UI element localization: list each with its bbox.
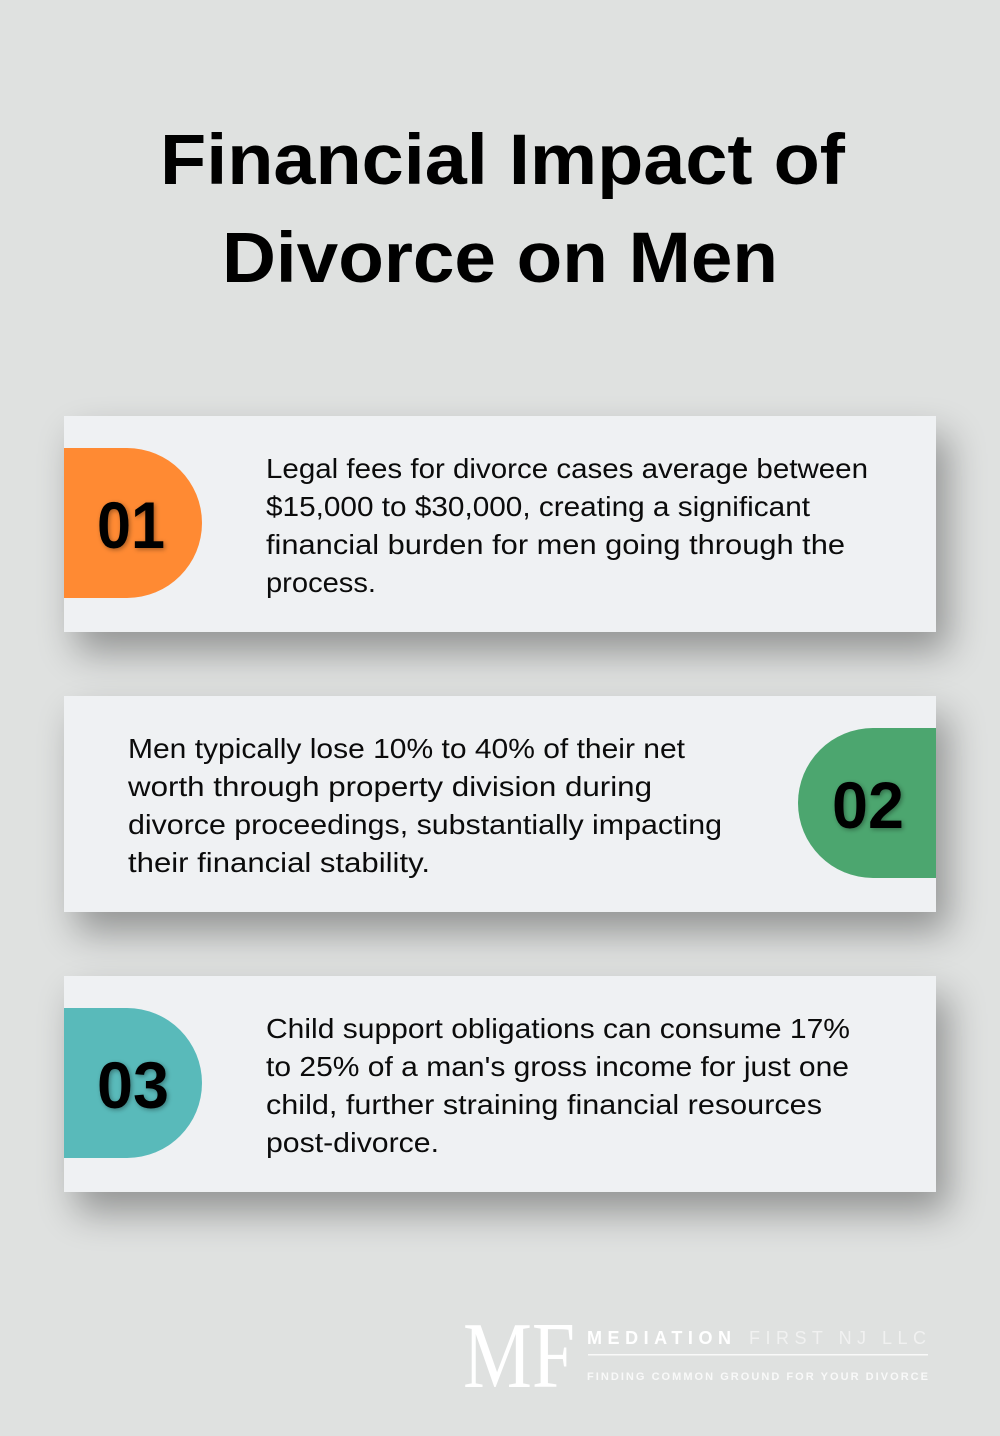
text: legal fees: $15,000 to $30,000, creating a significant <box>266 491 810 522</box>
text: child support: post-divorce. <box>266 1127 439 1158</box>
text: child support: child, further straining financial resources <box>266 1089 822 1120</box>
badge 01: 01 <box>97 488 165 562</box>
text: legal fees: Legal fees for divorce cases average between <box>266 453 868 484</box>
badge 03: 03 <box>97 1048 169 1122</box>
text: net worth: their financial stability. <box>128 847 430 878</box>
badge 02: 02 <box>832 768 904 842</box>
text: legal fees: process. <box>266 567 376 598</box>
text: net worth: worth through property division during <box>127 771 652 802</box>
badge 01 <box>64 448 202 598</box>
panel: legal fees <box>64 416 948 652</box>
logo: Mediation First NJ LLC <box>463 1304 928 1408</box>
logo monogram: MF <box>463 1304 575 1408</box>
text: child support: to 25% of a man's gross income for just one <box>266 1051 849 1082</box>
text: net worth: Men typically lose 10% to 40% of their net <box>128 733 685 764</box>
badge 03 <box>64 1008 202 1158</box>
text: child support <box>266 1013 850 1158</box>
badge 02 <box>798 728 936 878</box>
text: legal fees <box>266 453 868 598</box>
text: child support: Child support obligations can consume 17% <box>266 1013 850 1044</box>
text: legal fees: financial burden for men going through the <box>266 529 845 560</box>
text: net worth: divorce proceedings, substantially impacting <box>128 809 722 840</box>
panel: net worth <box>64 696 948 932</box>
title: Divorce on Men <box>222 219 778 298</box>
title: Financial Impact of <box>160 121 845 200</box>
panel: child support <box>64 976 948 1212</box>
logo tagline: FINDING COMMON GROUND FOR YOUR DIVORCE <box>587 1371 928 1383</box>
logo name: FIRST NJ LLC <box>749 1328 926 1348</box>
logo name: MEDIATION <box>587 1328 731 1348</box>
title <box>160 121 845 298</box>
text: net worth <box>127 733 722 878</box>
